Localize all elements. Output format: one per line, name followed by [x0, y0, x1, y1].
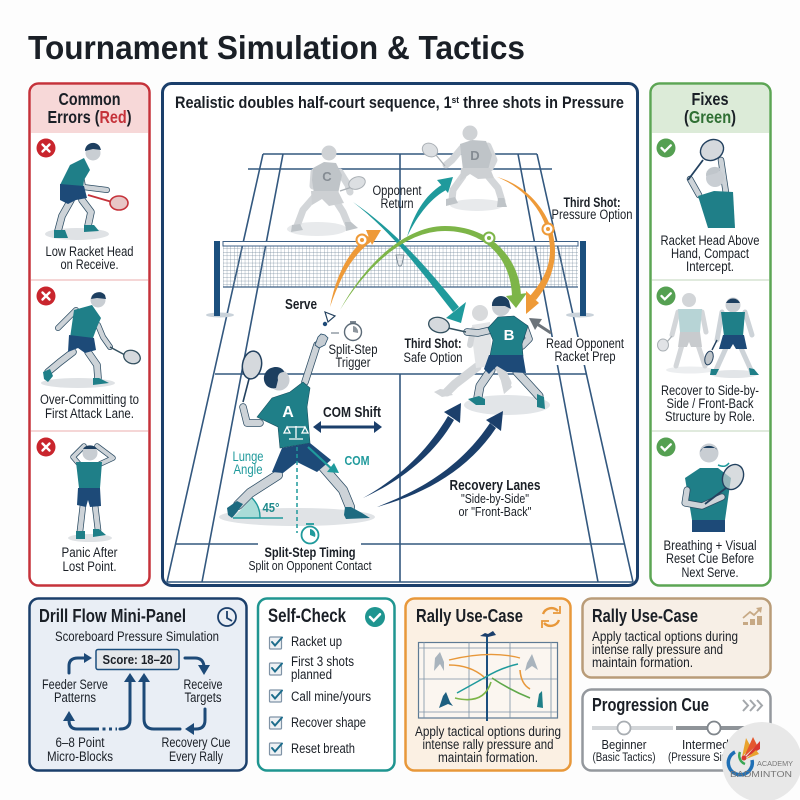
error 1 caption: Low Racket Head: [46, 244, 134, 259]
flow label: receive: [184, 677, 222, 705]
panel: drill flow: [30, 598, 246, 770]
serve shuttle: [323, 312, 335, 326]
scoreboard: [96, 650, 179, 670]
level: beginner: (Basic Tactics): [592, 752, 656, 764]
fix 3 caption: Breathing + Visual: [664, 538, 756, 553]
label: recovery lanes: [450, 478, 540, 519]
player C: [287, 146, 367, 236]
flow label: micro-blocks: Micro-Blocks: [47, 749, 113, 764]
flow label: receive: Receive: [184, 677, 222, 692]
watermark logo: ACADEMY: [757, 761, 793, 768]
errors header: [31, 85, 148, 133]
flow label: recovery cue: [162, 735, 230, 764]
arrow: green safe option: [340, 226, 527, 310]
icon: teal check: [365, 607, 385, 627]
lunge angle wedge: [233, 498, 283, 518]
fix 3 caption: Next Serve.: [682, 565, 738, 580]
tan text: maintain formation.: [592, 655, 693, 670]
shuttle at net: [396, 255, 404, 266]
court heading: three shots in Pressure: [459, 94, 624, 112]
player B with ghost partner: B: [504, 327, 515, 344]
error 3 caption: Panic After: [62, 545, 118, 560]
flow label: feeder: Patterns: [54, 690, 96, 705]
fix 2 caption: Side / Front-Back: [666, 396, 754, 411]
label: COM: COM: [344, 453, 370, 468]
label: third shot pressure: Pressure Option: [552, 207, 632, 222]
progression heading: Progression Cue: [592, 694, 709, 715]
arrow: orange pressure option: [497, 177, 555, 314]
arrow: teal to D: [407, 177, 453, 237]
error 1 caption: on Receive.: [60, 257, 118, 272]
COM shift arrow: [313, 421, 382, 433]
label: recovery lanes: "Side-by-Side": [461, 491, 529, 506]
error 2: over-committing: [36, 286, 142, 388]
flow label: feeder: [42, 677, 108, 705]
error 3 caption: [62, 545, 118, 574]
panel: court sequence: [162, 84, 638, 586]
label: opponent return: Opponent: [372, 183, 422, 198]
flow arrow: recovery to score: [138, 673, 180, 729]
checklist: Recover shape: [291, 715, 366, 730]
fix 1 caption: Racket Head Above: [660, 233, 760, 248]
icon: split-step trigger stopwatch: [331, 322, 362, 340]
player A: A: [282, 404, 294, 421]
errors header: Errors (Red): [48, 107, 132, 127]
checklist: First 3 shots: [291, 654, 354, 669]
label: lunge angle: Angle: [234, 462, 262, 477]
flow label: feeder: Feeder Serve: [42, 677, 108, 692]
label: read opponent: [544, 336, 628, 365]
label: third shot safe: Third Shot:: [404, 336, 462, 351]
error 3: panic: [36, 438, 113, 542]
label: third shot safe: [404, 336, 462, 365]
tan heading: Rally Use-Case: [592, 605, 698, 626]
court lines: [167, 154, 633, 582]
arrow: read opponent racket prep: [529, 318, 551, 333]
level: intermediate: [668, 737, 762, 764]
label: third shot pressure: [552, 195, 632, 222]
label: read opponent: Read Opponent: [546, 336, 624, 351]
label: lunge angle: Lunge: [232, 449, 264, 464]
checklist: Racket up: [291, 634, 342, 649]
icon: split-step timing stopwatch: [302, 524, 318, 544]
label: recovery lanes: Recovery Lanes: [450, 478, 540, 494]
player C: C: [322, 169, 332, 184]
progress track: [592, 722, 750, 734]
fix 3 caption: Reset Cue Before: [666, 551, 754, 566]
label: 45 degrees: 45°: [262, 501, 280, 515]
checklist: Reset breath: [291, 741, 355, 756]
tan text: [592, 629, 738, 670]
fixes header: (Green): [684, 107, 736, 127]
label: serve: Serve: [285, 297, 317, 313]
flow label: receive: Targets: [184, 690, 222, 705]
error 2 caption: [40, 392, 139, 421]
level: beginner: Beginner: [602, 737, 647, 752]
error 2 caption: First Attack Lane.: [45, 406, 134, 421]
label: opponent return: [372, 183, 422, 211]
arrow: orange serve: [330, 230, 381, 307]
checklist: planned: [291, 667, 332, 682]
errors header: Common: [58, 89, 120, 109]
watermark logo: [722, 722, 800, 800]
flow label: recovery cue: Recovery Cue: [162, 735, 230, 750]
fix 2 caption: Recover to Side-by-: [661, 383, 759, 398]
icon: refresh: [542, 606, 560, 628]
rally text: maintain formation.: [438, 750, 538, 765]
panel: fixes: [650, 84, 770, 586]
self-check heading: Self-Check: [268, 605, 346, 627]
flow label: recovery cue: Every Rally: [169, 749, 223, 764]
label: split-step timing: Split on Opponent Contact: [248, 558, 372, 573]
flow label: micro-blocks: [47, 735, 113, 764]
tan text: intense rally pressure and: [592, 642, 723, 657]
icon: clock: [218, 608, 236, 626]
flow arrow: score to receive: [185, 658, 210, 675]
rally text: Apply tactical options during: [415, 724, 561, 739]
drill subtitle: Scoreboard Pressure Simulation: [55, 629, 219, 644]
label: split-step timing: Split-Step Timing: [264, 545, 356, 560]
label: COM shift: COM Shift: [323, 404, 381, 421]
rally text: intense rally pressure and: [422, 737, 554, 752]
error 1 caption: [46, 244, 134, 272]
fix 1 caption: Intercept.: [686, 259, 734, 274]
title: Tournament Simulation & Tactics: [28, 29, 525, 66]
net: [206, 241, 594, 318]
checklist: [270, 634, 371, 756]
fix 3 caption: [664, 538, 756, 580]
label: lunge angle: [232, 449, 264, 477]
flow arrow: blocks up and feeder: [63, 673, 136, 729]
label: split-step trigger: Trigger: [336, 355, 371, 370]
player A: [219, 334, 375, 526]
fix 2 caption: Structure by Role.: [665, 409, 755, 424]
fix 1 caption: [660, 233, 760, 274]
label: read opponent: Racket Prep: [554, 349, 616, 364]
label: third shot safe: Safe Option: [404, 350, 462, 365]
label: opponent return: Return: [380, 196, 414, 211]
panel: rally use-case orange: [406, 598, 570, 770]
label: split-step trigger: Split-Step: [328, 342, 378, 357]
court heading: Realistic doubles half-court sequence, 1: [175, 94, 490, 112]
level: intermediate: Intermediate: [682, 737, 748, 752]
arrow: recovery lane 2: [377, 411, 503, 507]
label: split-step trigger: [328, 342, 378, 370]
tan text: Apply tactical options during: [592, 629, 738, 644]
fix 2 caption: [661, 383, 759, 424]
watermark logo: BADMINTON: [730, 770, 792, 779]
player D: [420, 126, 507, 211]
fixes header: [652, 85, 769, 133]
mini court diagram: [418, 631, 558, 721]
player B with ghost partner: [427, 296, 550, 415]
dashed COM drop line: [296, 447, 298, 533]
rally heading: Rally Use-Case: [416, 605, 523, 626]
court heading: st: [452, 95, 460, 106]
player D: D: [470, 148, 480, 163]
error 2 caption: Over-Committing to: [40, 392, 139, 407]
error 3 caption: Lost Point.: [62, 559, 116, 574]
level: intermediate: (Pressure Simulation): [668, 752, 762, 764]
checklist: Call mine/yours: [291, 689, 371, 704]
arrow: teal opponent return: [353, 202, 466, 323]
fix 3: breathing reset: [656, 438, 748, 532]
drill heading: Drill Flow Mini-Panel: [39, 605, 186, 626]
label: split-step timing: [248, 545, 372, 573]
panel: rally use-case tan: [582, 598, 770, 678]
panel: self-check: [258, 598, 394, 770]
panel: progression cue: [582, 690, 770, 770]
panel: common errors: [30, 84, 150, 586]
flow arrow: feeder to score: [69, 653, 92, 673]
error 1: low racket head: [36, 138, 128, 240]
scoreboard: Score: 18–20: [102, 652, 172, 667]
flow label: micro-blocks: 6–8 Point: [56, 735, 105, 750]
flow arrow: receive to recovery: [185, 709, 205, 735]
rally text: [415, 724, 561, 765]
fix 1 caption: Hand, Compact: [671, 246, 749, 261]
icon: growth chart: [743, 607, 762, 625]
arrow: recovery lane 1: [363, 403, 461, 498]
fixes header: Fixes: [692, 89, 729, 109]
level: beginner: [592, 737, 656, 764]
icon: chevrons: [743, 700, 762, 711]
label: third shot pressure: Third Shot:: [564, 195, 620, 210]
label: recovery lanes: or "Front-Back": [458, 504, 532, 519]
icon: balance scale: [284, 426, 308, 439]
fix 1: racket above hand: [656, 135, 735, 228]
fix 2: recover to structure: [656, 286, 759, 378]
